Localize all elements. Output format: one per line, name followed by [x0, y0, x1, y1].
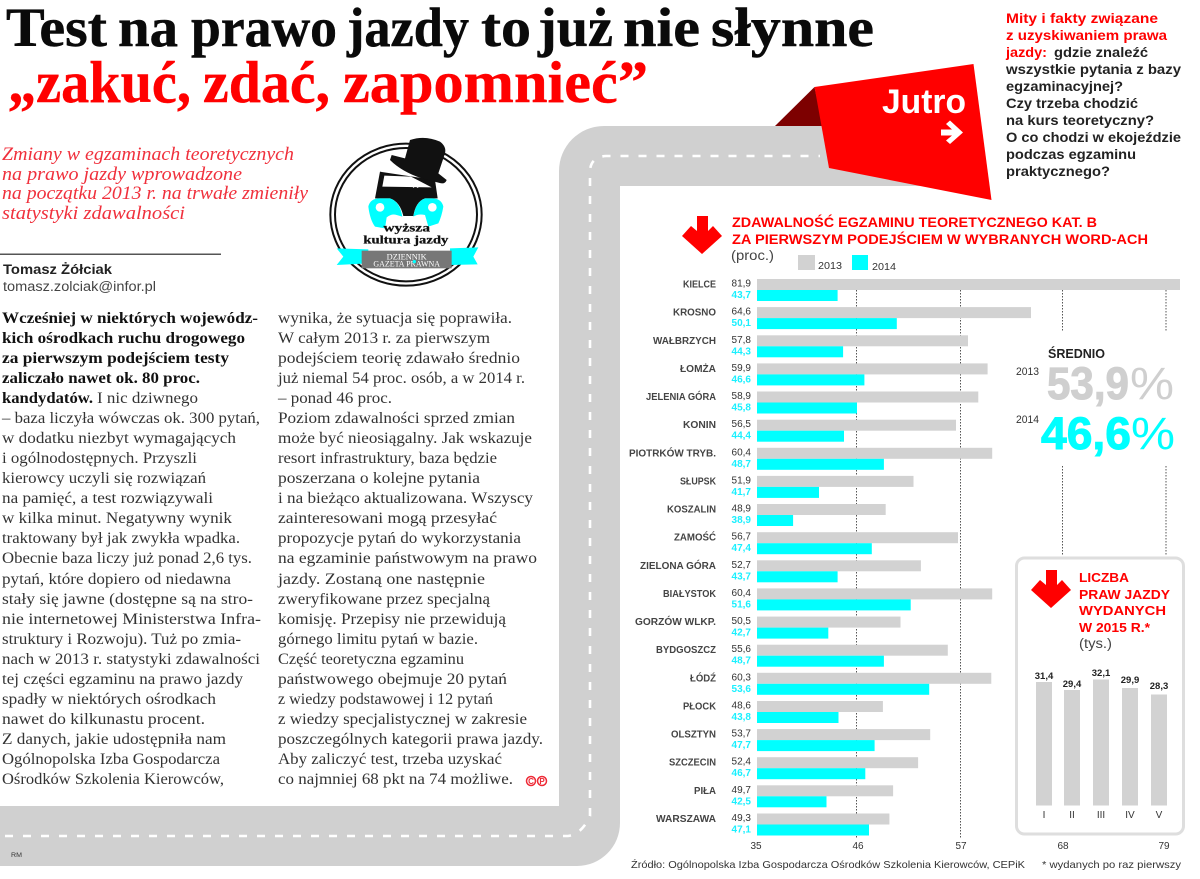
row: Słupsk: SŁUPSK	[680, 476, 717, 487]
flag: Jutro: Jutro	[882, 83, 966, 121]
row: Białystok: 60,4	[732, 588, 751, 599]
teaser text: O co chodzi w ekojeździe	[1006, 130, 1181, 145]
source: Źródło: Ogólnopolska Izba Gospodarcza Ośrodków Szkolenia Kierowców, CEPiK	[631, 858, 1025, 871]
row: Olsztyn: 53,7	[732, 729, 751, 740]
subheading	[2, 145, 309, 224]
article text column 1: struktury i Rozwoju). Tuż po zmia-	[2, 631, 241, 648]
row: Jelenia Góra: JELENIA GÓRA	[646, 390, 716, 403]
licences heading: LICZBA	[1079, 570, 1130, 585]
article text column 1	[1, 310, 261, 788]
row: Płock: 43,8	[732, 712, 751, 723]
article text column 2: już niemal 54 proc. osób, a w 2014 r.	[277, 370, 525, 387]
article text column 1: zaliczało nawet ok. 80 proc.	[2, 370, 200, 387]
licences heading: W 2015 R.*	[1079, 620, 1151, 635]
article text column 1: kandydatów.	[2, 390, 93, 407]
icon: red down arrow small	[1031, 570, 1071, 608]
row: Zamość: ZAMOŚĆ	[674, 531, 716, 544]
article text column 2: państwowego obejmuje 20 pytań	[278, 671, 507, 688]
row: Bydgoszcz: 55,6	[732, 644, 751, 655]
article text column 1: pytań, które dopiero od niedawna	[2, 571, 231, 588]
row: Jelenia Góra	[646, 390, 978, 414]
article text column 1: nawet do kilkunastu procent.	[2, 711, 205, 728]
teaser text: jazdy:	[1005, 45, 1047, 60]
flag: Jutro	[775, 64, 992, 200]
article text column 1: nach w 2013 r. statystyki zdawalności	[2, 651, 261, 668]
logo badge: DZIENNIK	[387, 251, 427, 261]
row: Warszawa: 47,1	[732, 824, 751, 836]
article text column 2: jazdy. Zostaną one następnie	[277, 571, 485, 588]
row: Piła: 42,5	[732, 796, 751, 807]
row: Szczecin: 46,7	[732, 768, 751, 779]
row: Krosno: 64,6	[732, 307, 751, 318]
logo badge: kultura jazdy	[363, 232, 448, 246]
row: Płock: PŁOCK	[683, 702, 717, 712]
legend: 2014	[872, 261, 896, 273]
teaser text: na kurs teoretyczny?	[1006, 113, 1154, 128]
article text column 1: w dodatku niezbyt wymagających	[2, 430, 236, 447]
article text column 2: może być nieosiągalny. Jak wskazuje	[278, 430, 532, 447]
column chart: 32,1	[1092, 668, 1111, 679]
row: Jelenia Góra: 45,8	[732, 402, 751, 414]
subheading: Zmiany w egzaminach teoretycznych	[2, 145, 294, 165]
row: Koszalin: 48,9	[732, 504, 751, 514]
article text column 1: Z danych, jakie udostępniła nam	[2, 731, 226, 748]
column chart: 31,4	[1035, 671, 1054, 682]
row: Bydgoszcz	[656, 644, 948, 667]
article text column 2: z wiedzy specjalistycznej w zakresie	[278, 711, 527, 728]
row: Łódź: ŁÓDŹ	[690, 671, 716, 684]
column chart: II	[1069, 810, 1075, 821]
article text column 2: Aby zaliczyć test, trzeba uzyskać	[278, 751, 502, 768]
row: Łomża	[680, 362, 988, 385]
row: Krosno	[673, 307, 1031, 329]
licences heading: WYDANYCH	[1079, 603, 1166, 618]
column chart: IV	[1125, 810, 1135, 821]
article text column 2: górnego limitu pytań w bazie.	[278, 631, 478, 648]
title: zdać,	[203, 49, 330, 115]
column chart	[1035, 668, 1168, 821]
row: Warszawa: WARSZAWA	[656, 814, 716, 825]
article text column 1: kich ośrodkach ruchu drogowego	[2, 330, 245, 347]
column chart: III	[1097, 810, 1105, 821]
bar chart: pass rate by WORD	[629, 278, 1180, 836]
row: Gorzów Wlkp.	[635, 615, 900, 639]
subheading: na początku 2013 r. na trwałe zmieniły	[2, 184, 309, 204]
row: Zielona Góra: 52,7	[732, 560, 751, 571]
article text column 2: propozycje pytań do wykorzystania	[278, 530, 521, 547]
row: Zamość: 47,4	[732, 543, 751, 554]
author byline: Tomasz Żółciak	[3, 262, 113, 277]
row: Piotrków Tryb.: 48,7	[732, 459, 751, 470]
row: Konin: 56,5	[732, 419, 751, 430]
row: Słupsk: 51,9	[732, 475, 751, 486]
teaser text: praktycznego?	[1006, 164, 1110, 179]
article text column 1: w kilka minut. Negatywny wynik	[2, 510, 232, 527]
article text column 1: stały się jawne (dostępne są na stro-	[2, 591, 253, 608]
row: Wałbrzych: 57,8	[732, 335, 751, 346]
logo badge: wyższa	[383, 221, 430, 235]
column chart: 29,4	[1063, 679, 1082, 690]
teaser text: Czy trzeba chodzić	[1006, 96, 1138, 111]
row: Konin: KONIN	[683, 420, 716, 431]
row: Białystok	[663, 588, 992, 610]
article text column 1: traktowany był jak zwykła wpadka.	[2, 530, 240, 547]
chart heading: (proc.)	[731, 248, 774, 263]
row: Łódź	[690, 671, 991, 695]
average values	[1016, 346, 1175, 459]
average values: ŚREDNIO	[1048, 346, 1105, 361]
row: Kielce: 81,9	[732, 278, 751, 290]
article text column 1: kierowcy uczyli się rozwiązań	[2, 470, 206, 487]
article text column 2: resort infrastruktury, baza będzie	[278, 450, 497, 467]
row: Zamość	[674, 531, 958, 554]
row: Olsztyn	[671, 729, 930, 751]
row: Piła: PIŁA	[694, 786, 716, 797]
article text column 1: I nic dziwnego	[97, 390, 198, 407]
article text column 1: Ośrodków Szkolenia Kierowców,	[2, 771, 224, 788]
chart axis labels: 57	[955, 841, 967, 852]
article text column 2	[277, 310, 543, 788]
article text column 1: i ogólnodostępnych. Przyszli	[2, 450, 198, 467]
article text column 2: wynika, że sytuacja się poprawiła.	[278, 310, 512, 327]
row: Olsztyn: 47,7	[732, 740, 751, 751]
copyright mark: P	[539, 777, 545, 786]
article text column 2: komisję. Przepisy nie przewidują	[278, 611, 507, 628]
chart heading: ZDAWALNOŚĆ EGZAMINU TEORETYCZNEGO KAT. B	[732, 215, 1097, 230]
row: Szczecin: SZCZECIN	[669, 758, 716, 769]
row: Bydgoszcz: BYDGOSZCZ	[656, 645, 716, 656]
row: Szczecin: 52,4	[732, 757, 751, 768]
row: Kielce	[683, 278, 1180, 301]
icon: red down arrow	[682, 216, 722, 254]
subheading: na prawo jazdy wprowadzone	[2, 165, 242, 185]
article text column 2: poszerzana o kolejne pytania	[278, 470, 480, 487]
subheading: statystyki zdawalności	[2, 204, 185, 224]
average values: 2013	[1016, 366, 1039, 378]
teaser text: wszystkie pytania z bazy	[1005, 62, 1181, 77]
average values: %	[1130, 358, 1174, 409]
average values: 53,9	[1047, 358, 1129, 409]
row: Piła	[694, 785, 893, 807]
row: Wałbrzych: 44,3	[732, 346, 751, 357]
row: Piotrków Tryb.	[629, 446, 992, 470]
row: Gorzów Wlkp.: GORZÓW WLKP.	[635, 615, 716, 628]
chart axis labels	[750, 841, 1170, 852]
row: Wałbrzych	[653, 335, 968, 357]
teaser text: Mity i fakty związane	[1006, 11, 1158, 26]
licences heading: PRAW JAZDY	[1079, 587, 1170, 602]
row: Łomża: ŁOMŻA	[680, 362, 716, 375]
article text column 2: zweryfikowane przez specjalną	[278, 591, 491, 608]
legend: 2013	[818, 260, 842, 272]
footnote: * wydanych po raz pierwszy	[1042, 859, 1182, 871]
row: Zielona Góra	[640, 559, 921, 582]
article text column 1: tej części egzaminu na prawo jazdy	[2, 671, 243, 688]
row: Gorzów Wlkp.: 42,7	[732, 628, 751, 639]
chart axis labels: 35	[750, 841, 762, 852]
title	[6, 0, 874, 115]
licences heading	[1079, 570, 1170, 651]
author initials: RM	[11, 853, 22, 859]
row: Zielona Góra: ZIELONA GÓRA	[640, 559, 716, 572]
article text column 2: i na bieżąco aktualizowana. Wszyscy	[278, 490, 533, 507]
row: Białystok: 51,6	[732, 599, 751, 610]
chart heading	[731, 215, 1148, 263]
panel: licences issued	[1016, 558, 1184, 834]
article text column 1: – baza liczyła wówczas ok. 300 pytań,	[1, 410, 260, 427]
article text column 2: na egzaminie państwowym na prawo	[278, 550, 537, 567]
average values: 2014	[1016, 414, 1039, 426]
row: Szczecin	[669, 757, 918, 779]
title: zapomnieć”	[343, 49, 648, 115]
article text column 1: na pamięć, a test rozwiązywali	[2, 490, 214, 507]
article text column 2: poszczególnych kategorii prawa jazdy.	[278, 731, 543, 748]
row: Koszalin: KOSZALIN	[667, 504, 716, 516]
row: Łomża: 46,6	[732, 374, 751, 385]
row: Konin	[683, 419, 956, 442]
row: Piotrków Tryb.: 60,4	[732, 447, 751, 458]
road band	[0, 126, 930, 866]
chart axis labels: 79	[1158, 841, 1170, 852]
legend	[798, 255, 896, 273]
row: Warszawa: 49,3	[732, 813, 751, 824]
article text column 1: Wcześniej w niektórych wojewódz-	[2, 310, 258, 327]
row: Krosno: KROSNO	[673, 308, 716, 319]
teaser text: egzaminacyjnej?	[1006, 79, 1123, 94]
row: Słupsk	[680, 475, 914, 498]
author byline: tomasz.zolciak@infor.pl	[3, 279, 156, 294]
row: Piotrków Tryb.: PIOTRKÓW TRYB.	[629, 446, 716, 459]
row: Gorzów Wlkp.: 50,5	[732, 616, 751, 627]
article text column 2: z wiedzy podstawowej i 12 pytań	[278, 691, 493, 708]
author byline	[0, 254, 221, 294]
row: Łomża: 59,9	[732, 363, 751, 374]
column chart: 28,3	[1150, 681, 1168, 692]
title: „zakuć,	[8, 49, 191, 115]
row: Kielce: KIELCE	[683, 280, 716, 290]
row: Koszalin	[667, 504, 886, 526]
average values: 46,6	[1041, 408, 1131, 459]
article text column 2: podejściem teorię zdawało średnio	[278, 350, 520, 367]
row: Olsztyn: OLSZTYN	[671, 730, 716, 741]
row: Łódź: 60,3	[732, 672, 751, 683]
teaser text: gdzie znaleźć	[1054, 45, 1148, 60]
row: Koszalin: 38,9	[732, 515, 751, 526]
chart gridlines	[856, 290, 1166, 838]
article text column 2: Część teoretyczna egzaminu	[278, 651, 464, 668]
row: Płock	[683, 700, 883, 723]
teaser text: podczas egzaminu	[1006, 147, 1136, 162]
row: Wałbrzych: WAŁBRZYCH	[653, 336, 716, 347]
row: Słupsk: 41,7	[732, 487, 751, 498]
chart axis labels: 46	[852, 841, 864, 852]
average values: %	[1131, 408, 1175, 459]
article text column 1: Ogólnopolska Izba Gospodarcza	[2, 751, 220, 768]
article text column 1: Obecnie baza liczy już ponad 2,6 tys.	[2, 550, 252, 567]
article text column 1: nie internetowej Ministerstwa Infra-	[2, 611, 261, 628]
row: Płock: 48,6	[732, 700, 751, 712]
row: Jelenia Góra: 58,9	[732, 391, 751, 402]
row: Białystok: BIAŁYSTOK	[663, 589, 717, 600]
logo badge: GAZETA PRAWNA	[373, 259, 441, 269]
row: Zielona Góra: 43,7	[732, 571, 751, 582]
chart heading: ZA PIERWSZYM PODEJŚCIEM W WYBRANYCH WORD-ACH	[732, 232, 1148, 247]
teaser text: z uzyskiwaniem prawa	[1006, 28, 1167, 43]
article text column 2: Poziom zdawalności sprzed zmian	[278, 410, 515, 427]
row: Piła: 49,7	[732, 785, 751, 796]
article text column 2: W całym 2013 r. za pierwszym	[278, 330, 490, 347]
teaser text	[1005, 11, 1181, 179]
row: Bydgoszcz: 48,7	[732, 656, 751, 667]
copyright mark	[526, 776, 546, 786]
row: Konin: 44,4	[732, 431, 751, 442]
column chart: V	[1156, 810, 1163, 821]
licences heading: (tys.)	[1079, 636, 1112, 651]
article text column 1: za pierwszym podejściem testy	[2, 350, 229, 367]
article text column 1: spadły w niektórych ośrodkach	[2, 691, 216, 708]
chart axis labels: 68	[1057, 841, 1069, 852]
logo badge	[330, 138, 482, 286]
copyright mark: C	[528, 777, 534, 786]
row: Łódź: 53,6	[732, 684, 751, 695]
article text column 2: co najmniej 68 pkt na 74 możliwe.	[278, 771, 513, 788]
row: Warszawa	[656, 813, 889, 836]
row: Krosno: 50,1	[732, 318, 751, 329]
row: Kielce: 43,7	[732, 290, 751, 301]
column chart: I	[1043, 810, 1045, 821]
article text column 2: – ponad 46 proc.	[277, 390, 392, 407]
column chart: 29,9	[1121, 675, 1139, 686]
row: Zamość: 56,7	[732, 532, 751, 543]
article text column 2: zainteresowani mogą przesyłać	[278, 510, 497, 527]
